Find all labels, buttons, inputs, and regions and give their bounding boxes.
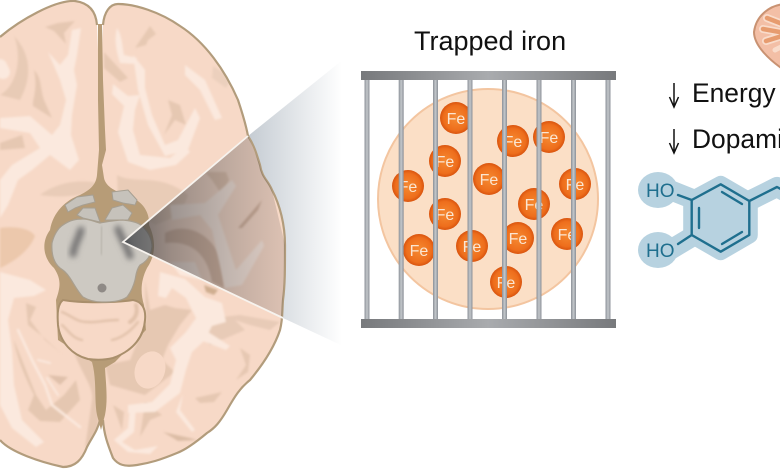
dopamine molecule: [638, 172, 780, 268]
Fe particle 2: [497, 125, 529, 157]
light gyri under wedge: [170, 180, 264, 288]
Fe particle 12: Fe: [410, 243, 428, 260]
longitudinal fissure and central cistern: [44, 24, 154, 430]
Fe particle 5: Fe: [480, 172, 498, 189]
Fe particle 9: [429, 198, 461, 230]
wedge border lines: [123, 136, 283, 318]
cell circle: [378, 89, 598, 309]
cage vertical bars: [364, 79, 610, 320]
Fe particle 12: [403, 234, 435, 266]
sulci under wedge: [206, 172, 229, 190]
Fe particle 6: [392, 170, 424, 202]
Fe particle 11: Fe: [558, 227, 576, 244]
Fe particle 10: [502, 222, 534, 254]
Fe particle 8: Fe: [525, 197, 543, 214]
Fe particle 8: [518, 188, 550, 220]
mammillary and optic lobes: [65, 190, 137, 222]
Fe particle 4: [429, 145, 461, 177]
iron cage illustration: [361, 71, 616, 328]
cage top bar: [361, 71, 616, 80]
illustration: brain, ventral view: [0, 1, 285, 467]
brain outline: [0, 1, 285, 467]
Fe particle 13: Fe: [463, 239, 481, 256]
heading: Trapped iron: Trapped iron: [414, 26, 566, 56]
substantia nigra left: [73, 230, 81, 254]
aqueduct: [98, 284, 106, 292]
Fe particle 11: [551, 218, 583, 250]
Fe particle 14: Fe: [497, 275, 515, 292]
molecule bonds: [678, 184, 780, 252]
left hemisphere: [0, 1, 100, 467]
iron particles: [392, 102, 591, 298]
Fe particle 9: Fe: [436, 207, 454, 224]
Fe particle 7: [559, 168, 591, 200]
Fe particle 3: Fe: [540, 130, 558, 147]
Fe particle 10: Fe: [509, 231, 527, 248]
central line: [101, 226, 102, 255]
callout cone: zoom from brain to inset: [248, 58, 345, 347]
Fe particle 14: [490, 266, 522, 298]
hydroxyl label top: HO: [646, 181, 674, 202]
pons / cerebellar lobe: [58, 300, 145, 360]
text: decreased energy: Energy: [692, 78, 776, 108]
Fe particle 7: Fe: [566, 177, 584, 194]
Fe particle 5: [473, 163, 505, 195]
icon: down arrow: [670, 83, 678, 107]
right hemisphere: [100, 4, 285, 466]
molecule halo: [638, 172, 780, 268]
substantia nigra right: [118, 229, 130, 256]
cage bottom bar: [361, 319, 616, 328]
Fe particle 1: Fe: [447, 111, 465, 128]
hydroxyl label bottom: HO: [646, 241, 674, 262]
Fe particle 2: Fe: [504, 134, 522, 151]
icon: down arrow: [670, 129, 678, 153]
icon: mitochondrion: [754, 4, 780, 74]
zoom wedge over brain: [123, 136, 285, 318]
Fe particle 6: Fe: [399, 179, 417, 196]
Fe particle 4: Fe: [436, 154, 454, 171]
Fe particle 13: [456, 230, 488, 262]
Fe particle 1: [440, 102, 472, 134]
Fe particle 3: [533, 121, 565, 153]
midbrain section: [52, 219, 152, 302]
lower right light trunk: [128, 272, 226, 413]
